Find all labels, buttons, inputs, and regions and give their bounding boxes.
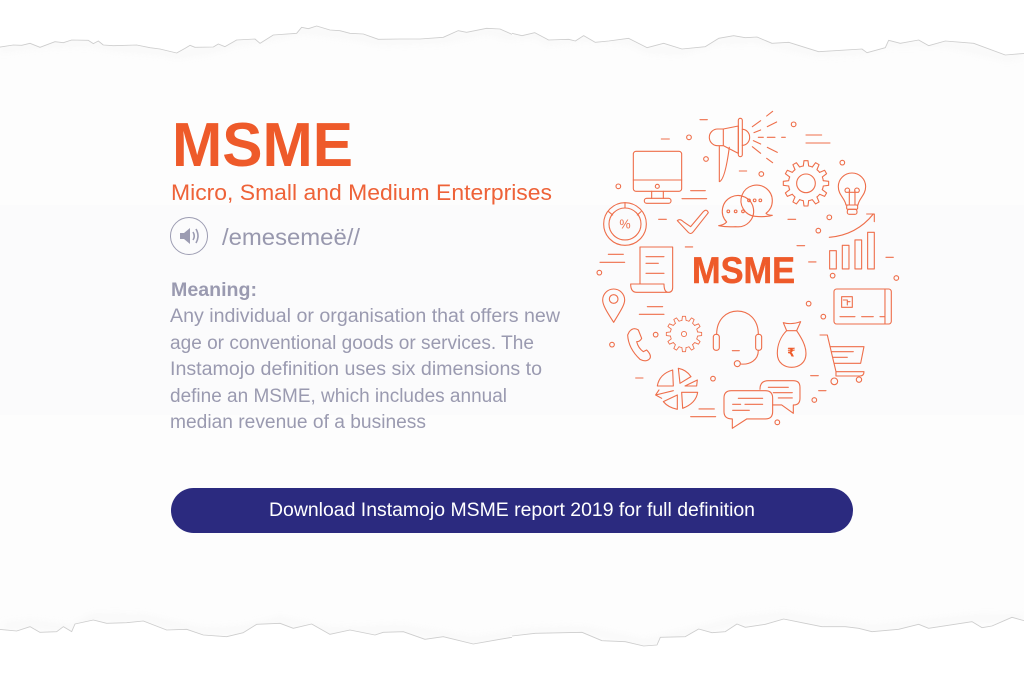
icons upper half <box>600 111 893 269</box>
icon: small gear <box>666 316 702 352</box>
button: download report: Download Instamojo MSME report 2019 for full definition <box>269 500 755 521</box>
icon: document <box>631 247 673 292</box>
white area below bottom edge <box>0 617 1024 675</box>
icon: percent donut: % <box>619 218 631 232</box>
icon: phone <box>628 329 650 361</box>
icon: percent donut <box>604 203 646 245</box>
text block: meaning: Instamojo definition uses six dimensions to <box>170 359 542 380</box>
icon: location pin <box>603 289 625 322</box>
text block: meaning: define an MSME, which includes annual <box>170 386 507 407</box>
icon: speaker <box>170 218 208 254</box>
icon: shopping cart <box>820 335 864 385</box>
text block: meaning: age or conventional goods or services. The <box>170 333 534 354</box>
icon: pie chart <box>656 368 698 409</box>
dots and dashes <box>597 270 899 425</box>
text block: meaning: median revenue of a business <box>170 412 426 433</box>
icon: chat bubbles <box>719 185 772 227</box>
icon: light bulb <box>838 173 866 214</box>
button: download report <box>171 488 853 533</box>
icon: money bag: ₹ <box>787 346 795 360</box>
icons lower half <box>597 247 899 428</box>
icon: monitor <box>633 151 682 203</box>
icon: credit card <box>834 289 891 324</box>
pronunciation: /emesemeë// <box>222 224 361 250</box>
icon: gear <box>783 161 829 206</box>
icon: growth chart <box>829 214 874 269</box>
text block: meaning <box>170 280 560 433</box>
icon: megaphone <box>709 111 785 182</box>
icon: check mark <box>677 210 708 234</box>
text block: meaning: Meaning: <box>171 280 257 301</box>
text block: meaning: Any individual or organisation that offers new <box>170 306 560 327</box>
icon: headset <box>713 311 762 367</box>
label: MSME centre: MSME <box>692 250 795 291</box>
dots and dashes <box>600 120 893 262</box>
subtitle: Micro, Small and Medium Enterprises <box>171 180 552 205</box>
illustration: MSME icon circle <box>597 111 899 428</box>
title: MSME <box>172 111 353 180</box>
icon: money bag <box>777 322 806 367</box>
white area above top edge <box>0 0 1024 55</box>
icon: speech bubbles <box>724 381 800 428</box>
